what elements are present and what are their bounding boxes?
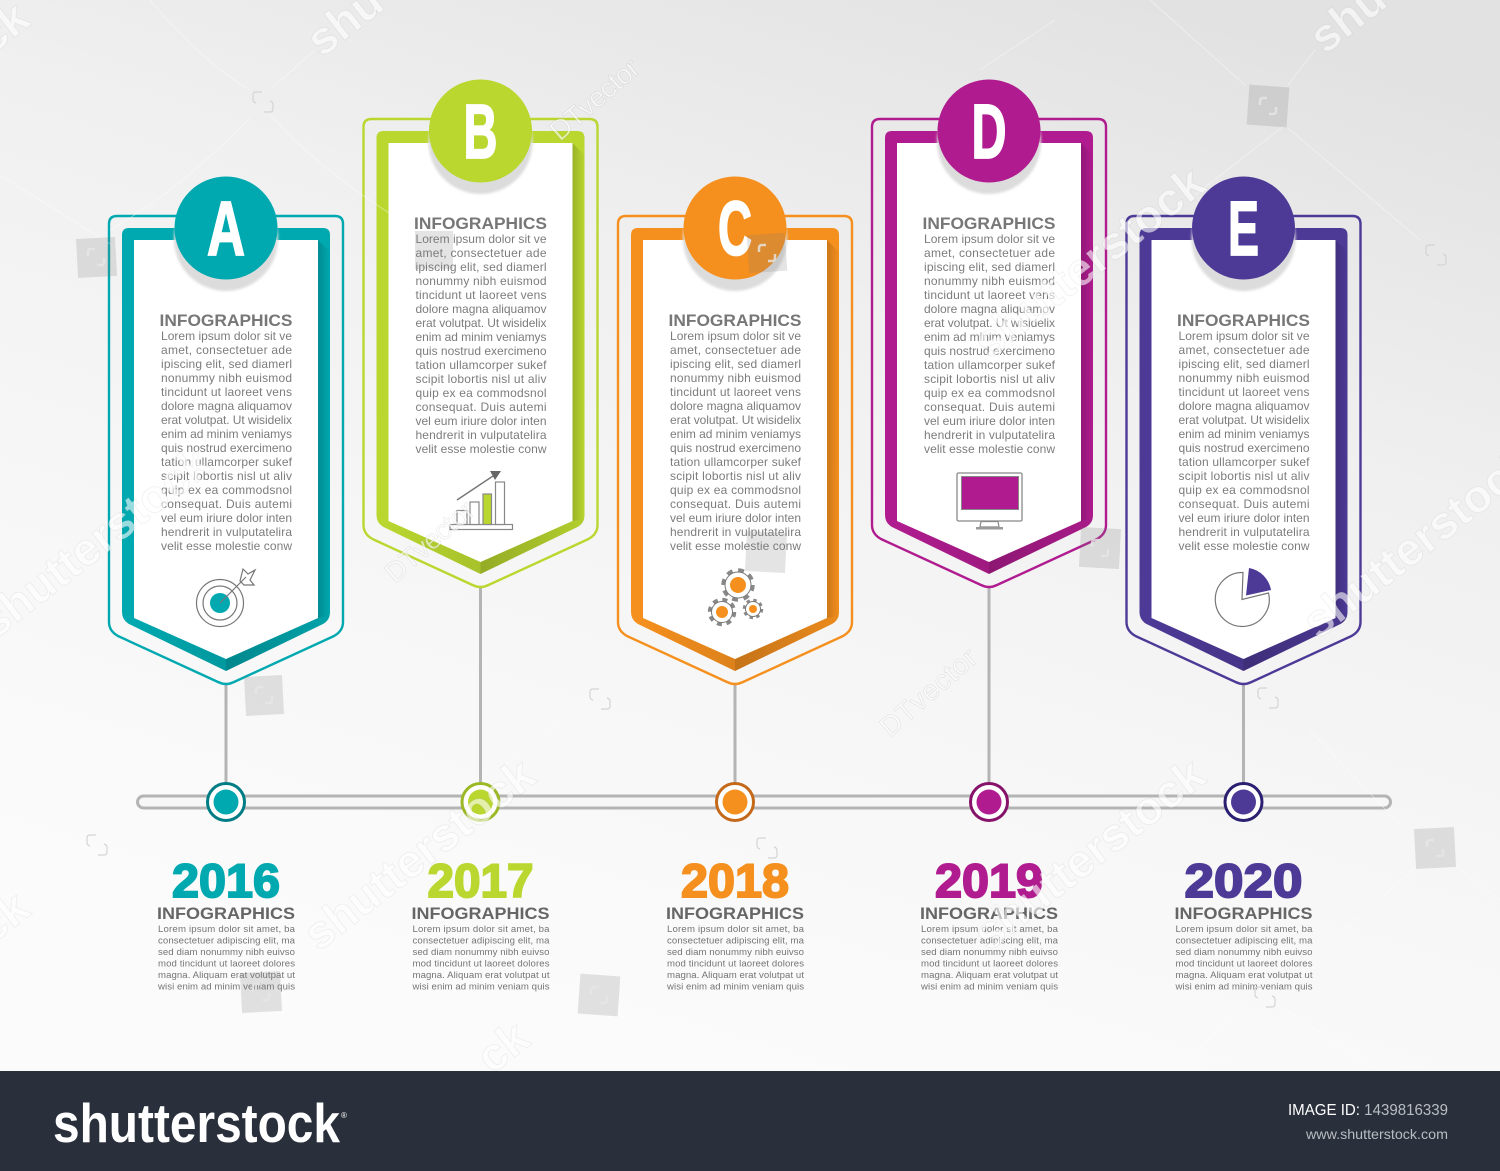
lower title C: INFOGRAPHICS <box>666 904 804 923</box>
badge D <box>938 80 1040 182</box>
lower body text A: wisi enim ad minim veniam quis <box>157 982 295 992</box>
card body text B: vel eum iriure dolor inten <box>416 414 546 428</box>
card body text E: quip ex ea commodsnol <box>1178 483 1310 497</box>
year 2016: 2016 <box>172 854 280 907</box>
letter B: B <box>464 89 498 175</box>
lower body text D: mod tincidunt ut laoreet dolores <box>921 958 1058 970</box>
card body text D: nonummy nibh euismod <box>924 274 1055 288</box>
card body text A: quis nostrud exercimeno <box>161 441 292 455</box>
stock watermark overlay: DTvector <box>379 494 480 589</box>
icon: target with arrow <box>196 569 255 626</box>
card body text B: hendrerit in vulputatelira <box>416 428 547 442</box>
card body text A: hendrerit in vulputatelira <box>161 525 292 539</box>
card body text D: quip ex ea commodsnol <box>924 386 1055 400</box>
lower body text A: consectetuer adipiscing elit, ma <box>158 936 296 946</box>
stock watermark overlay: DTvector <box>544 52 645 147</box>
card body text B: tincidunt ut laoreet vens <box>416 288 546 302</box>
lower body text E: magna. Aliquam erat volutpat ut <box>1176 970 1313 981</box>
badge shadow A <box>174 187 278 291</box>
badge shadow D <box>937 90 1041 194</box>
letter D: D <box>972 89 1006 175</box>
timeline dot B <box>462 784 499 820</box>
lower body text D: magna. Aliquam erat volutpat ut <box>921 970 1058 981</box>
card body text C: tation ullamcorper sukef <box>670 455 802 469</box>
outer outline E <box>1126 216 1360 684</box>
card body text B: consequat. Duis autemi <box>416 400 546 414</box>
icon: three gears <box>710 570 762 624</box>
card body text D: dolore magna aliquamov <box>924 302 1055 316</box>
white card D <box>897 143 1081 562</box>
lower body text D <box>920 924 1059 992</box>
lower body text C: mod tincidunt ut laoreet dolores <box>667 958 804 970</box>
timeline bar <box>138 796 1390 808</box>
card body text C: hendrerit in vulputatelira <box>670 525 801 539</box>
card body text C: enim ad minim veniamys <box>670 427 801 441</box>
badge A <box>174 176 278 280</box>
badge shadow C <box>683 187 787 291</box>
card body text D: quis nostrud exercimeno <box>924 344 1055 358</box>
lower body text A: Lorem ipsum dolor sit amet, ba <box>158 924 296 935</box>
outer outline D <box>872 119 1106 587</box>
card body text C: dolore magna aliquamov <box>670 399 801 413</box>
card body text D: tation ullamcorper sukef <box>924 358 1056 372</box>
card body text C: erat volutpat. Ut wisidelix <box>670 413 801 427</box>
lower body text E: wisi enim ad minim veniam quis <box>1174 982 1313 992</box>
badge shadow B <box>428 90 532 194</box>
card body text C: vel eum iriure dolor inten <box>670 511 801 525</box>
card body text B: nonummy nibh euismod <box>416 274 546 288</box>
card body text C: tincidunt ut laoreet vens <box>670 385 801 399</box>
card body text E: hendrerit in vulputatelira <box>1178 525 1310 539</box>
footer logo: shutterstock <box>53 1092 340 1154</box>
card body text D: enim ad minim veniamys <box>924 330 1055 344</box>
connector stem B <box>479 587 482 784</box>
white card E <box>1152 240 1336 659</box>
card body text E: quis nostrud exercimeno <box>1178 441 1310 455</box>
card body text D: vel eum iriure dolor inten <box>924 414 1055 428</box>
card body text B: dolore magna aliquamov <box>416 302 546 316</box>
card body text D: amet, consectetuer ade <box>924 246 1055 260</box>
lower body text C: magna. Aliquam erat volutpat ut <box>667 970 804 981</box>
card body text E: amet, consectetuer ade <box>1178 343 1310 357</box>
card body text A: erat volutpat. Ut wisidelix <box>161 413 292 427</box>
panel E: 2020 <box>1126 176 1360 992</box>
card body text E: erat volutpat. Ut wisidelix <box>1178 413 1310 427</box>
letter C: C <box>718 186 752 272</box>
timeline dot C <box>716 784 754 820</box>
panel A: 2016 <box>109 176 343 992</box>
card body text C: Lorem ipsum dolor sit ve <box>670 329 801 343</box>
card body text A: vel eum iriure dolor inten <box>161 511 292 525</box>
card body text D: hendrerit in vulputatelira <box>924 428 1055 442</box>
lower title A: INFOGRAPHICS <box>157 904 295 923</box>
outer outline A <box>109 216 343 684</box>
card body text A: ipiscing elit, sed diamerl <box>161 357 292 371</box>
connector stem E <box>1242 684 1245 784</box>
lower body text B: consectetuer adipiscing elit, ma <box>412 936 550 946</box>
frame shading A <box>126 240 330 671</box>
card body text B: velit esse molestie conw <box>416 442 547 456</box>
thick frame A <box>122 228 330 671</box>
white card A <box>134 240 318 659</box>
lower body text B: Lorem ipsum dolor sit amet, ba <box>412 924 550 935</box>
card body text C: consequat. Duis autemi <box>670 497 801 511</box>
footer bar <box>0 1071 1500 1171</box>
image id: IMAGE ID: 1439816339 <box>1288 1102 1448 1119</box>
lower body text A: sed diam nonummy nibh euivso <box>158 947 295 958</box>
thick frame B <box>376 131 584 574</box>
card body text A: scipit lobortis nisl ut aliv <box>161 469 292 483</box>
panel B: 2017 <box>364 80 598 992</box>
frame shading D <box>889 143 1093 574</box>
card title C: INFOGRAPHICS <box>668 312 802 330</box>
outer outline B <box>364 119 598 587</box>
card body text A: nonummy nibh euismod <box>161 371 292 385</box>
card body text B: amet, consectetuer ade <box>416 246 547 260</box>
lower body text A: magna. Aliquam erat volutpat ut <box>158 970 295 981</box>
card body text B: scipit lobortis nisl ut aliv <box>416 372 546 386</box>
card body text A: quip ex ea commodsnol <box>161 483 292 497</box>
timeline dot A <box>208 784 244 820</box>
lower body text B <box>412 924 550 992</box>
badge E <box>1192 176 1295 280</box>
card body text A: consequat. Duis autemi <box>161 497 292 511</box>
card body text C: scipit lobortis nisl ut aliv <box>670 469 801 483</box>
card body text A: Lorem ipsum dolor sit ve <box>161 329 292 343</box>
lower body text E: consectetuer adipiscing elit, ma <box>1176 936 1313 946</box>
card body text B: quip ex ea commodsnol <box>416 386 546 400</box>
card body text E: tincidunt ut laoreet vens <box>1178 385 1310 399</box>
card body text C: nonummy nibh euismod <box>670 371 801 385</box>
lower body text E: mod tincidunt ut laoreet dolores <box>1176 958 1313 970</box>
lower body text C <box>666 924 805 992</box>
card body text E: ipiscing elit, sed diamerl <box>1178 357 1310 371</box>
registered mark: ® <box>341 1111 347 1120</box>
footer url: www.shutterstock.com <box>1305 1126 1448 1142</box>
card body text C <box>670 329 802 553</box>
card title D: INFOGRAPHICS <box>922 215 1056 233</box>
card body text E: tation ullamcorper sukef <box>1178 455 1310 469</box>
card title E: INFOGRAPHICS <box>1177 312 1310 330</box>
card body text C: velit esse molestie conw <box>670 539 801 553</box>
thick frame C <box>631 228 839 671</box>
timeline dot D <box>970 784 1008 820</box>
lower body text D: consectetuer adipiscing elit, ma <box>921 936 1059 946</box>
lower title D: INFOGRAPHICS <box>920 904 1058 923</box>
card title B: INFOGRAPHICS <box>414 215 547 233</box>
card body text A: tation ullamcorper sukef <box>161 455 293 469</box>
connector stem C <box>734 684 736 784</box>
year 2020: 2020 <box>1184 854 1302 907</box>
card body text E: enim ad minim veniamys <box>1178 427 1310 441</box>
card body text D: scipit lobortis nisl ut aliv <box>924 372 1055 386</box>
lower body text B: sed diam nonummy nibh euivso <box>412 947 550 958</box>
lower body text C: sed diam nonummy nibh euivso <box>667 947 804 958</box>
card body text D: Lorem ipsum dolor sit ve <box>924 232 1055 246</box>
card body text C: ipiscing elit, sed diamerl <box>670 357 801 371</box>
panel C: 2018 <box>618 176 852 992</box>
lower body text B: magna. Aliquam erat volutpat ut <box>412 970 550 981</box>
lower body text B: wisi enim ad minim veniam quis <box>412 982 550 992</box>
card body text A: enim ad minim veniamys <box>161 427 292 441</box>
frame shading E <box>1144 240 1348 671</box>
outer outline C <box>618 216 852 684</box>
lower body text C: Lorem ipsum dolor sit amet, ba <box>667 924 805 935</box>
card body text B: erat volutpat. Ut wisidelix <box>416 316 546 330</box>
card body text E: velit esse molestie conw <box>1178 539 1310 553</box>
lower title E: INFOGRAPHICS <box>1174 904 1312 923</box>
card body text A: velit esse molestie conw <box>161 539 292 553</box>
lower body text A <box>157 924 296 992</box>
card body text C: quis nostrud exercimeno <box>670 441 801 455</box>
lower body text A: mod tincidunt ut laoreet dolores <box>158 958 295 970</box>
card body text B: Lorem ipsum dolor sit ve <box>416 232 547 246</box>
stock watermark overlay: shutterstock <box>963 155 1215 368</box>
lower body text E <box>1174 924 1313 992</box>
card body text A: dolore magna aliquamov <box>161 399 292 413</box>
card title A: INFOGRAPHICS <box>160 312 292 330</box>
lower body text E: sed diam nonummy nibh euivso <box>1176 947 1312 958</box>
lower body text D: sed diam nonummy nibh euivso <box>921 947 1058 958</box>
lower body text B: mod tincidunt ut laoreet dolores <box>412 958 550 970</box>
card body text B: quis nostrud exercimeno <box>416 344 547 358</box>
stock watermark overlay: shutterstock <box>963 747 1215 960</box>
letter A: A <box>207 186 245 272</box>
card body text D: consequat. Duis autemi <box>924 400 1055 414</box>
lower body text D: wisi enim ad minim veniam quis <box>920 982 1058 992</box>
card body text E: scipit lobortis nisl ut aliv <box>1178 469 1310 483</box>
frame shading C <box>635 240 839 671</box>
stock watermark overlay: ck <box>466 1010 539 1083</box>
stock watermark overlay: DTvector <box>874 642 983 743</box>
lower body text C: wisi enim ad minim veniam quis <box>666 982 804 992</box>
card body text D: velit esse molestie conw <box>924 442 1055 456</box>
card body text E <box>1178 329 1310 553</box>
year 2017: 2017 <box>427 854 534 907</box>
badge C <box>684 176 786 280</box>
card body text B: ipiscing elit, sed diamerl <box>416 260 546 274</box>
lower body text C: consectetuer adipiscing elit, ma <box>667 936 805 946</box>
year 2018: 2018 <box>681 854 789 907</box>
badge B <box>429 80 532 182</box>
card body text D: ipiscing elit, sed diamerl <box>924 260 1055 274</box>
card body text B: enim ad minim veniamys <box>416 330 546 344</box>
connector stem D <box>988 587 990 784</box>
card body text E: nonummy nibh euismod <box>1178 371 1310 385</box>
lower body text E: Lorem ipsum dolor sit amet, ba <box>1176 924 1313 935</box>
icon: monitor <box>957 473 1022 530</box>
card body text E: vel eum iriure dolor inten <box>1178 511 1310 525</box>
card body text E: consequat. Duis autemi <box>1178 497 1310 511</box>
thick frame E <box>1140 228 1348 671</box>
card body text E: dolore magna aliquamov <box>1178 399 1310 413</box>
card body text A <box>161 329 293 553</box>
lower body text D: Lorem ipsum dolor sit amet, ba <box>921 924 1059 935</box>
card body text E: Lorem ipsum dolor sit ve <box>1178 329 1310 343</box>
icon: rising bar chart <box>450 471 512 530</box>
frame shading B <box>380 143 584 574</box>
card body text D: erat volutpat. Ut wisidelix <box>924 316 1055 330</box>
card body text C: quip ex ea commodsnol <box>670 483 801 497</box>
connector stem A <box>224 684 228 784</box>
white card C <box>643 240 827 659</box>
letter E: E <box>1228 186 1259 272</box>
card body text C: amet, consectetuer ade <box>670 343 801 357</box>
card body text B <box>416 232 547 456</box>
card body text A: amet, consectetuer ade <box>161 343 292 357</box>
icon: pie chart <box>1215 568 1271 626</box>
card body text D: tincidunt ut laoreet vens <box>924 288 1055 302</box>
thick frame D <box>885 131 1093 574</box>
stock watermark overlay: shutterstock <box>293 747 545 960</box>
card body text B: tation ullamcorper sukef <box>416 358 547 372</box>
white card B <box>388 143 572 562</box>
year 2019: 2019 <box>935 854 1043 907</box>
card body text A: tincidunt ut laoreet vens <box>161 385 292 399</box>
timeline dot E <box>1225 784 1262 820</box>
lower title B: INFOGRAPHICS <box>412 904 550 923</box>
card body text D <box>924 232 1056 456</box>
badge shadow E <box>1192 187 1296 291</box>
panel D: 2019 <box>872 80 1106 992</box>
